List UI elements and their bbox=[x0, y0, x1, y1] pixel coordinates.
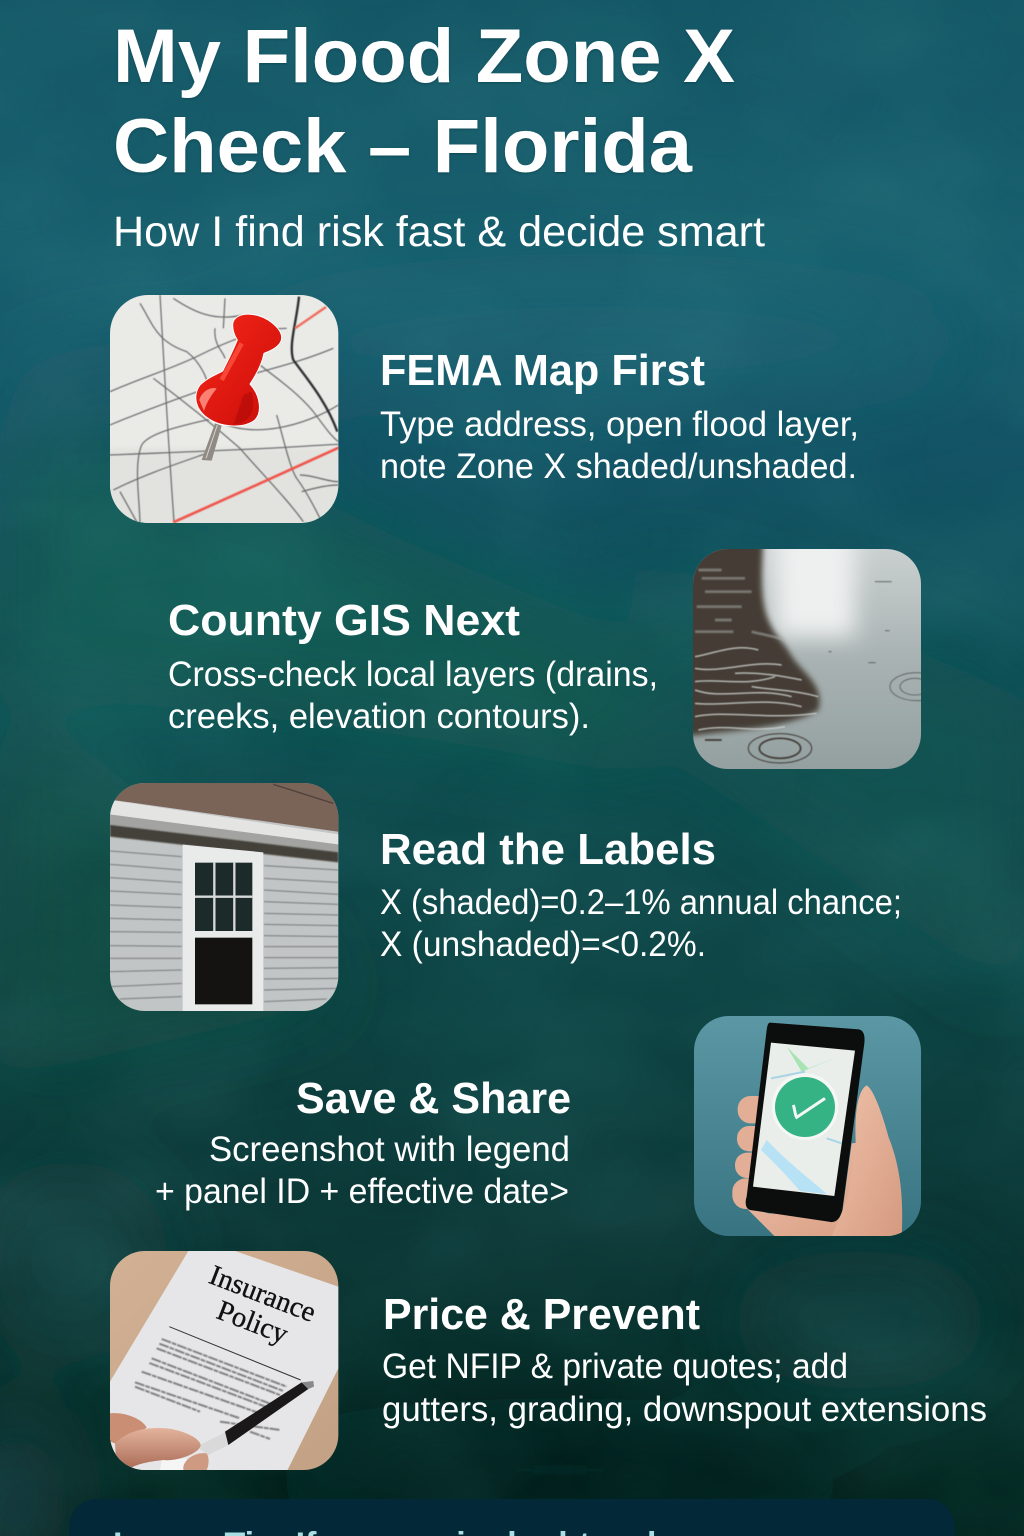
photo: map with red push pin bbox=[110, 295, 338, 523]
body text bbox=[380, 883, 902, 964]
step 3: Read the Labels bbox=[100, 775, 902, 1020]
title: Check – Florida bbox=[113, 104, 693, 189]
title bbox=[113, 14, 735, 189]
photo: rain puddle bbox=[693, 549, 921, 769]
title: My Flood Zone X bbox=[113, 14, 735, 99]
heading: Save & Share bbox=[296, 1074, 571, 1123]
body text: Type address, open flood layer, bbox=[380, 405, 859, 444]
subtitle: How I find risk fast & decide smart bbox=[113, 208, 765, 256]
body text: X (shaded)=0.2–1% annual chance; bbox=[380, 883, 902, 922]
body text: Cross-check local layers (drains, bbox=[168, 655, 658, 694]
step 5: Price & Prevent bbox=[100, 1245, 987, 1480]
heading: County GIS Next bbox=[168, 596, 520, 645]
body text: Screenshot with legend bbox=[209, 1130, 570, 1169]
body text: + panel ID + effective date> bbox=[155, 1172, 569, 1211]
photo: hand holding phone with map and check mark bbox=[694, 1016, 921, 1236]
body text: gutters, grading, downspout extensions bbox=[382, 1390, 987, 1429]
heading: Price & Prevent bbox=[383, 1290, 700, 1339]
heading: FEMA Map First bbox=[380, 346, 705, 395]
step 1: FEMA Map First bbox=[110, 295, 856, 523]
step 2: County GIS Next bbox=[169, 549, 921, 769]
body text: note Zone X shaded/unshaded. bbox=[380, 447, 857, 486]
photo: insurance policy document and pen: Insurance bbox=[205, 1259, 320, 1329]
body text: Get NFIP & private quotes; add bbox=[382, 1347, 848, 1386]
footer callout panel, cut off at page bottom bbox=[69, 1499, 955, 1536]
heading: Read the Labels bbox=[380, 825, 716, 874]
photo: house siding and window bbox=[110, 783, 338, 1011]
body text: creeks, elevation contours). bbox=[168, 697, 590, 736]
body text: X (unshaded)=<0.2%. bbox=[380, 925, 706, 964]
step 4: Save & Share bbox=[155, 1010, 930, 1245]
photo: insurance policy document and pen: Policy bbox=[212, 1294, 293, 1351]
body text bbox=[155, 1130, 570, 1211]
body text bbox=[168, 655, 658, 736]
body text bbox=[380, 405, 859, 486]
photo: insurance policy document and pen bbox=[100, 1245, 350, 1480]
body text bbox=[382, 1347, 987, 1429]
